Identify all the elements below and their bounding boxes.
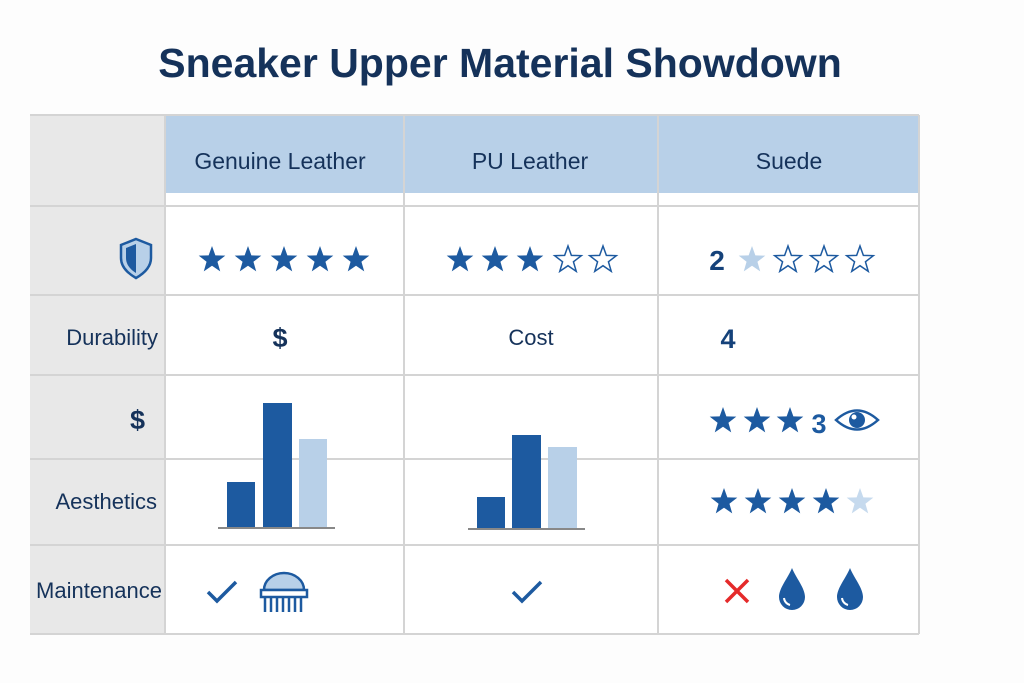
column headers <box>194 148 822 174</box>
maintenance icons <box>208 568 863 612</box>
row labels <box>36 325 162 603</box>
row2 values <box>272 323 736 354</box>
row2 values: 4 <box>720 324 736 354</box>
suede row3 stars + eye: 3 <box>811 409 827 439</box>
row labels: $ <box>130 405 145 435</box>
row labels: Aesthetics <box>56 489 157 514</box>
row2 values: Cost <box>508 325 554 350</box>
bar chart: PU leather <box>468 435 585 529</box>
row1 stars <box>199 245 873 276</box>
row1 stars: 2 <box>709 245 725 276</box>
suede row3 stars + eye <box>710 407 878 439</box>
column headers: Suede <box>756 148 822 174</box>
icon: shield <box>121 239 151 278</box>
row2 values: $ <box>272 323 288 353</box>
row labels: Durability <box>66 325 158 350</box>
column headers: PU Leather <box>472 148 589 174</box>
table <box>30 115 919 634</box>
row labels: Maintenance <box>36 578 162 603</box>
title: Sneaker Upper Material Showdown <box>158 40 842 86</box>
bar chart: genuine leather <box>218 403 335 528</box>
suede row4 stars <box>711 488 873 513</box>
column headers: Genuine Leather <box>194 148 366 174</box>
